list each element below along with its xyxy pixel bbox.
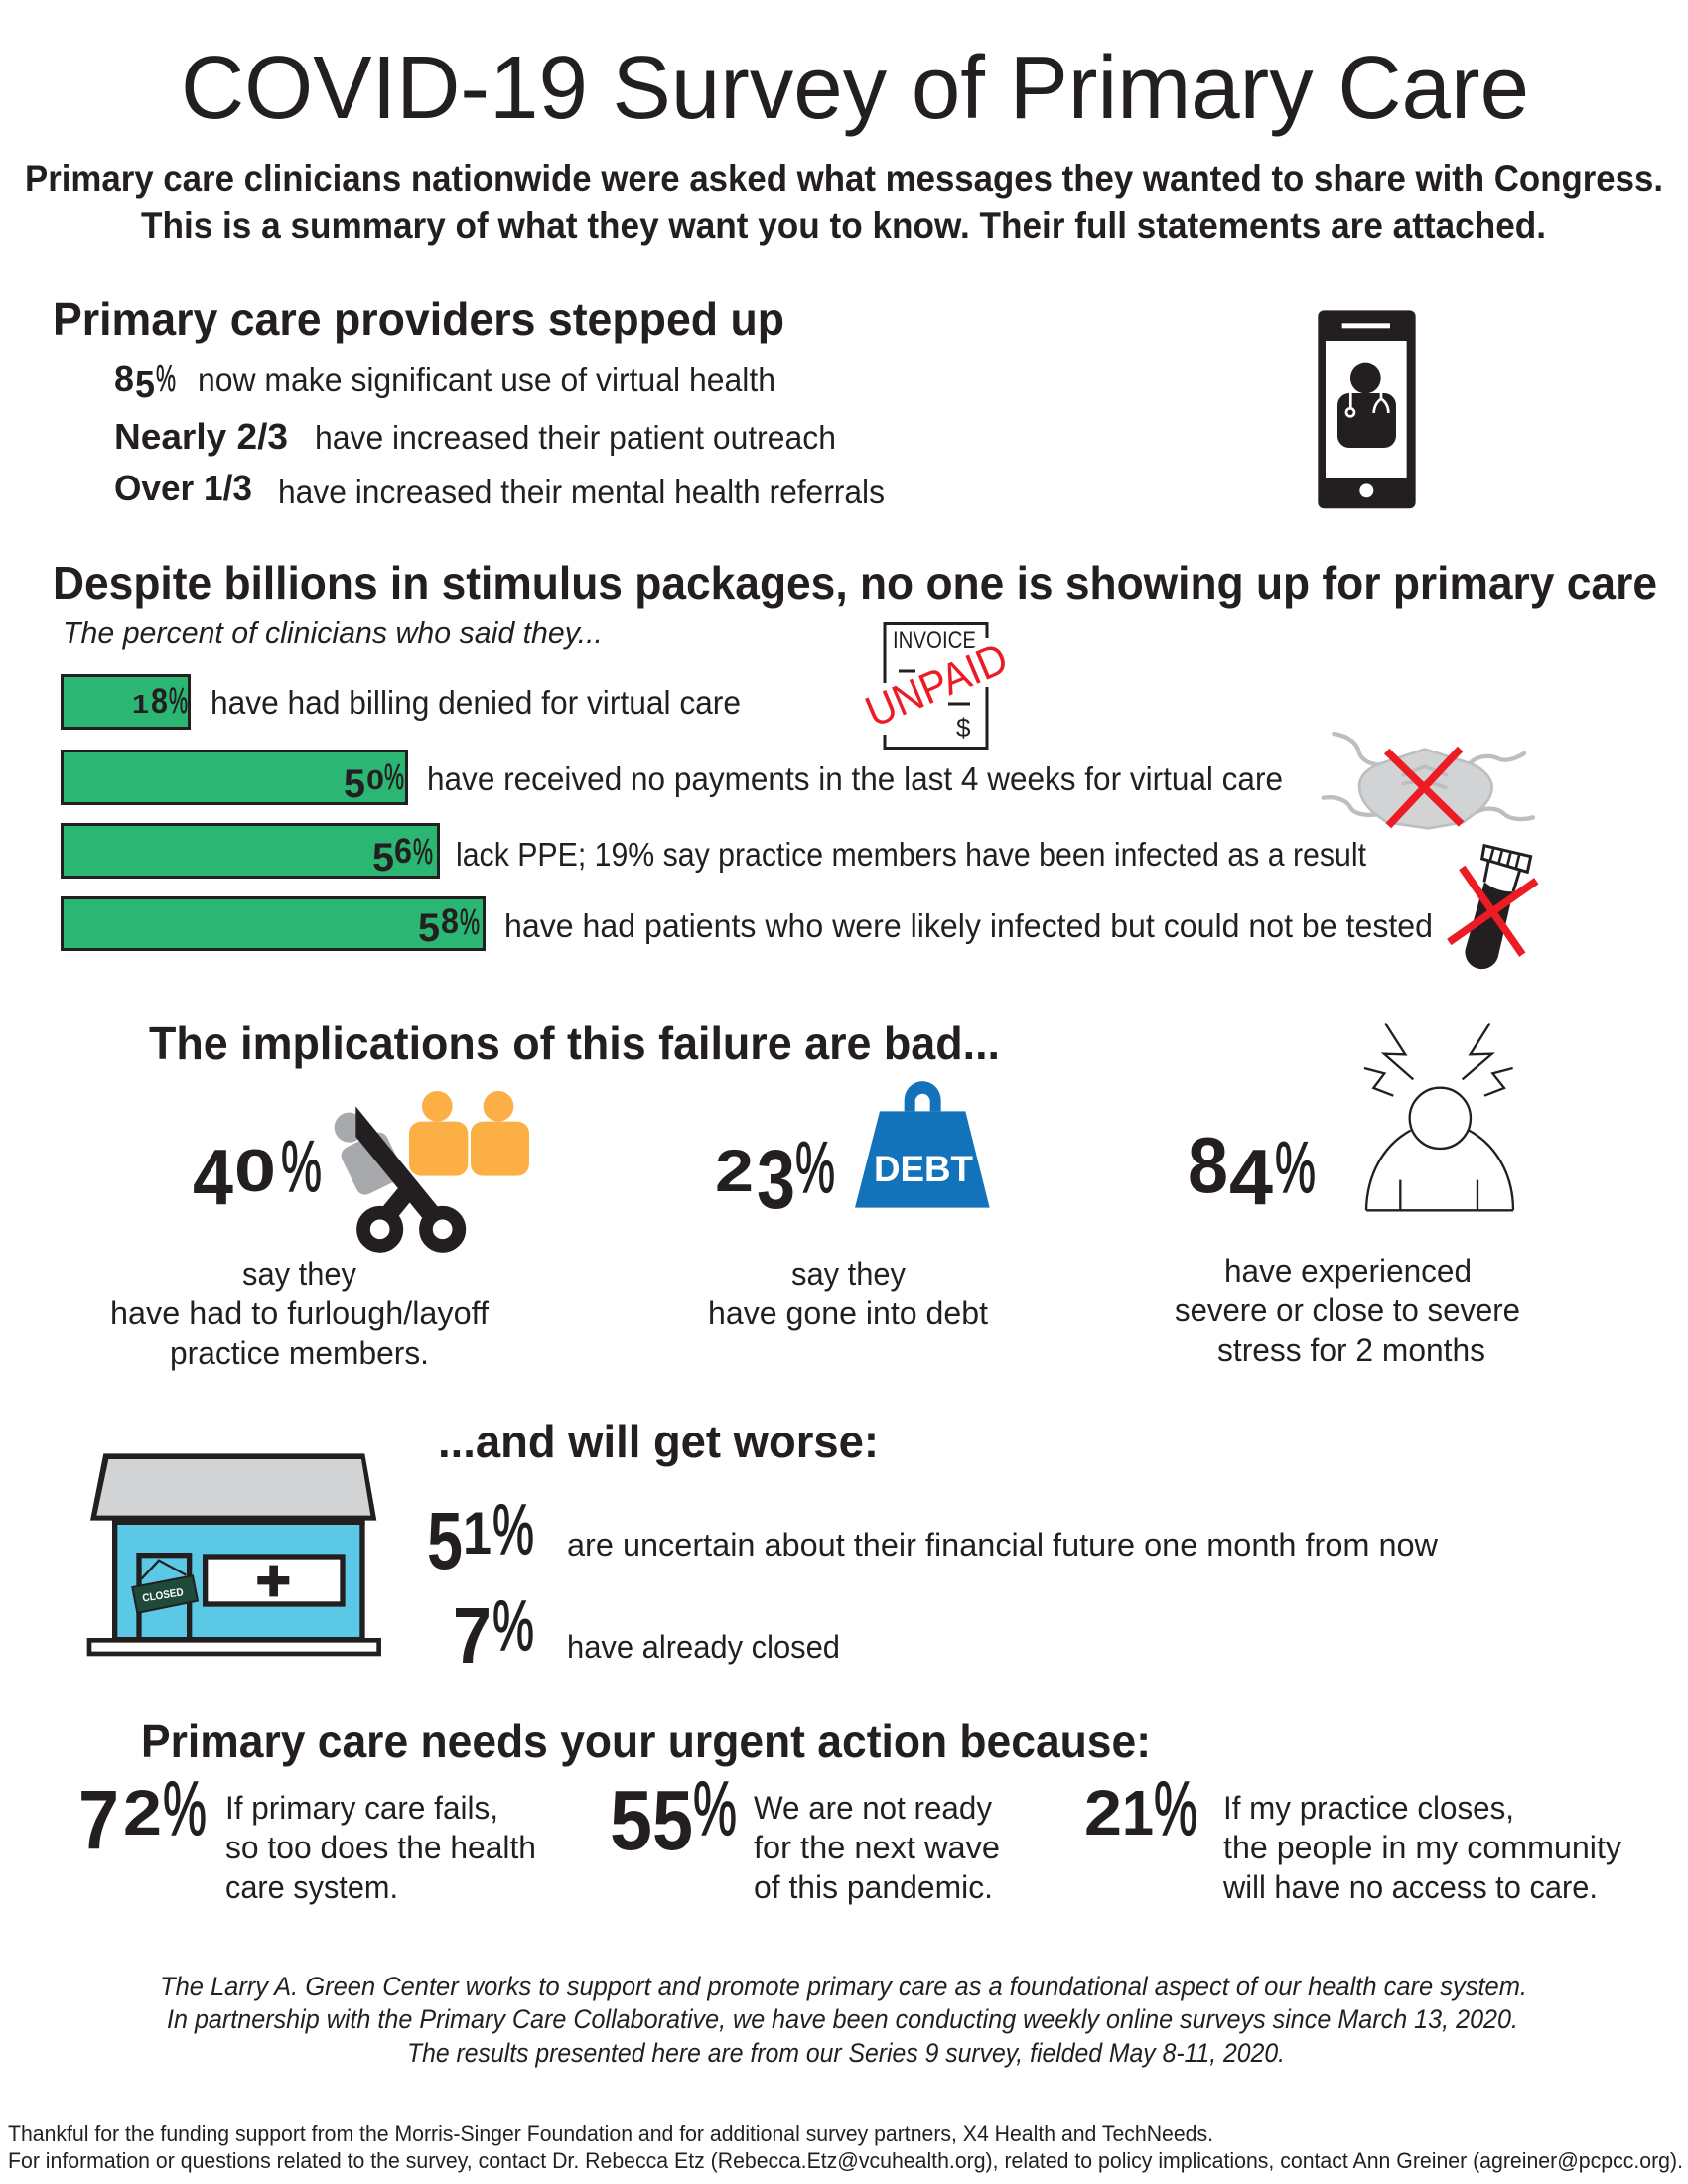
intro text bbox=[25, 158, 1663, 246]
icon: unpaid invoice: INVOICE bbox=[893, 627, 976, 654]
title: COVID-19 Survey of Primary Care bbox=[181, 39, 1529, 138]
panel: will get worse bbox=[89, 1416, 1439, 1680]
stat: 84% stress: have experienced bbox=[1224, 1253, 1472, 1289]
icon: crossed-out mask bbox=[1324, 734, 1533, 828]
icon: debt weight bbox=[855, 1081, 990, 1208]
bar: 56%: 5 bbox=[372, 836, 394, 880]
stat: patient outreach: Nearly 2/3 bbox=[114, 416, 288, 457]
quote: 21% bbox=[1084, 1766, 1621, 1905]
panel: providers stepped up bbox=[53, 293, 1416, 510]
footer credits: Thankful for the funding support from the Morris-Singer Foundation and for additional survey partners, X4 Health and TechNeeds. bbox=[8, 2121, 1213, 2146]
bar: 50%: 5 bbox=[344, 762, 365, 806]
stat: 23% debt: % bbox=[795, 1128, 835, 1208]
quote: 72%: care system. bbox=[225, 1869, 398, 1905]
quote: 21%: the people in my community bbox=[1223, 1830, 1621, 1865]
quote: 21%: 1 bbox=[1122, 1777, 1154, 1848]
stat: virtual health: % bbox=[156, 358, 176, 399]
stat: 23% debt: 2 bbox=[715, 1138, 754, 1204]
icon: phone with doctor bbox=[1318, 310, 1416, 508]
stat: 84% stress: 8 bbox=[1188, 1121, 1228, 1209]
bar: 18% bbox=[62, 675, 741, 729]
stat: 84% stress: severe or close to severe bbox=[1175, 1293, 1520, 1328]
stat: virtual health: now make significant use of virtual health bbox=[198, 361, 775, 398]
about text bbox=[160, 1972, 1527, 2068]
quote: 55%: We are not ready bbox=[754, 1790, 992, 1826]
quote: 72%: 7 bbox=[78, 1773, 119, 1866]
icon: unpaid invoice: UNPAID bbox=[859, 633, 1015, 737]
stat: 51% uncertain: 1 bbox=[463, 1500, 492, 1567]
bar: 58%: 5 bbox=[418, 906, 440, 950]
stat: 7% closed: % bbox=[492, 1587, 534, 1666]
quote: 72%: so too does the health bbox=[225, 1830, 536, 1865]
bar: 58%: 8 bbox=[441, 902, 459, 941]
quote: 55%: 5 bbox=[652, 1774, 693, 1868]
stat: 51% uncertain: 5 bbox=[427, 1496, 463, 1586]
stat: 51% uncertain: % bbox=[492, 1491, 534, 1570]
bar: 56%: % bbox=[413, 831, 433, 872]
stat: virtual health: 5 bbox=[135, 364, 155, 406]
stat: 40% furlough: practice members. bbox=[170, 1335, 429, 1371]
intro text: This is a summary of what they want you to know. Their full statements are attached. bbox=[141, 205, 1546, 246]
stat: 40% furlough bbox=[110, 1127, 489, 1371]
bar: 18%: 1 bbox=[132, 689, 149, 719]
quote: 21%: If my practice closes, bbox=[1223, 1790, 1514, 1826]
quote: 72%: 2 bbox=[123, 1777, 162, 1848]
heading: stepped up: Primary care providers stepped up bbox=[53, 293, 784, 344]
bar: 50%: have received no payments in the last 4 weeks for virtual care bbox=[427, 760, 1283, 797]
stat: 7% closed: 7 bbox=[453, 1591, 492, 1680]
bar: 58%: % bbox=[460, 901, 480, 942]
stat: mental health referrals: have increased their mental health referrals bbox=[278, 474, 885, 510]
stat: virtual health bbox=[114, 358, 775, 406]
stat: mental health referrals: Over 1/3 bbox=[114, 468, 252, 508]
bar: 18%: have had billing denied for virtual care bbox=[211, 684, 741, 721]
icon: debt weight: DEBT bbox=[874, 1148, 973, 1189]
stat: patient outreach: have increased their patient outreach bbox=[315, 419, 836, 456]
quote: 55% bbox=[610, 1766, 1000, 1905]
footer credits bbox=[8, 2121, 1683, 2173]
stat: virtual health: 8 bbox=[114, 358, 134, 399]
stat: 23% debt: 3 bbox=[757, 1133, 795, 1226]
stat: 40% furlough: 4 bbox=[193, 1133, 233, 1221]
quote: 21%: will have no access to care. bbox=[1222, 1869, 1598, 1905]
quote: 55%: of this pandemic. bbox=[754, 1869, 993, 1905]
stat: 23% debt: say they bbox=[791, 1256, 906, 1292]
heading: will get worse: ...and will get worse: bbox=[438, 1416, 879, 1467]
stat: 40% furlough: say they bbox=[242, 1256, 356, 1292]
bar: 18%: 8 bbox=[151, 682, 168, 721]
heading: implications: The implications of this failure are bad... bbox=[149, 1018, 1000, 1069]
icon: unpaid invoice: $ bbox=[956, 713, 971, 743]
quote: 72%: % bbox=[163, 1766, 207, 1851]
bar chart bbox=[62, 675, 1433, 950]
stat: 23% debt bbox=[708, 1128, 988, 1331]
bar: 18%: % bbox=[169, 680, 188, 721]
icon: closed clinic bbox=[89, 1453, 379, 1654]
icon: closed clinic: CLOSED bbox=[142, 1586, 185, 1605]
stat: 7% closed: have already closed bbox=[567, 1629, 840, 1665]
panel: no one showing up bbox=[53, 557, 1657, 969]
stat: patient outreach bbox=[114, 416, 836, 457]
panel: urgent action bbox=[78, 1715, 1621, 1905]
about text: The results presented here are from our Series 9 survey, fielded May 8-11, 2020. bbox=[407, 2038, 1285, 2068]
quote: 72% bbox=[78, 1766, 536, 1905]
quote: 55%: for the next wave bbox=[754, 1830, 1000, 1865]
stat: mental health referrals bbox=[114, 468, 885, 510]
stat: 84% stress: % bbox=[1275, 1128, 1316, 1208]
icon: stressed person bbox=[1364, 1024, 1513, 1210]
about text: In partnership with the Primary Care Collaborative, we have been conducting weekly online surveys since March 13, 2020. bbox=[167, 2004, 1518, 2034]
about text: The Larry A. Green Center works to support and promote primary care as a foundational aspect of our health care system. bbox=[160, 1972, 1527, 2001]
icon: crossed-out test tube bbox=[1449, 846, 1536, 969]
stat: 84% stress: 4 bbox=[1229, 1133, 1273, 1221]
bar: 50%: % bbox=[384, 756, 404, 797]
quote: 72%: If primary care fails, bbox=[225, 1790, 498, 1826]
quote: 21%: % bbox=[1154, 1766, 1197, 1851]
stat: 40% furlough: % bbox=[281, 1127, 322, 1207]
panel: implications bbox=[110, 1018, 1520, 1371]
stat: 40% furlough: 0 bbox=[234, 1138, 276, 1204]
bar: 50%: 0 bbox=[366, 764, 384, 795]
stat: 51% uncertain bbox=[427, 1491, 1439, 1586]
bar: 50% bbox=[62, 751, 1283, 806]
chart subtitle: The percent of clinicians who said they... bbox=[63, 615, 603, 650]
stat: 51% uncertain: are uncertain about their financial future one month from now bbox=[567, 1527, 1439, 1563]
bar: 56% bbox=[62, 824, 1366, 880]
bar: 56%: lack PPE; 19% say practice members have been infected as a result bbox=[456, 836, 1366, 873]
stat: 84% stress bbox=[1175, 1121, 1520, 1368]
quote: 21%: 2 bbox=[1084, 1777, 1122, 1848]
bar: 58% bbox=[62, 897, 1433, 950]
heading: urgent action: Primary care needs your urgent action because: bbox=[141, 1715, 1151, 1767]
stat: 40% furlough: have had to furlough/layoff bbox=[110, 1296, 489, 1331]
icon: scissors and staff bbox=[335, 1091, 529, 1246]
quote: 55%: 5 bbox=[610, 1774, 652, 1868]
bar: 58%: have had patients who were likely infected but could not be tested bbox=[504, 907, 1433, 944]
heading: stimulus: Despite billions in stimulus packages, no one is showing up for primary care bbox=[53, 557, 1657, 609]
stat: 84% stress: stress for 2 months bbox=[1217, 1332, 1485, 1368]
bar: 56%: 6 bbox=[394, 832, 412, 871]
stat: 7% closed bbox=[453, 1587, 840, 1680]
quote: 55%: % bbox=[693, 1766, 737, 1851]
stat: 23% debt: have gone into debt bbox=[708, 1296, 988, 1331]
